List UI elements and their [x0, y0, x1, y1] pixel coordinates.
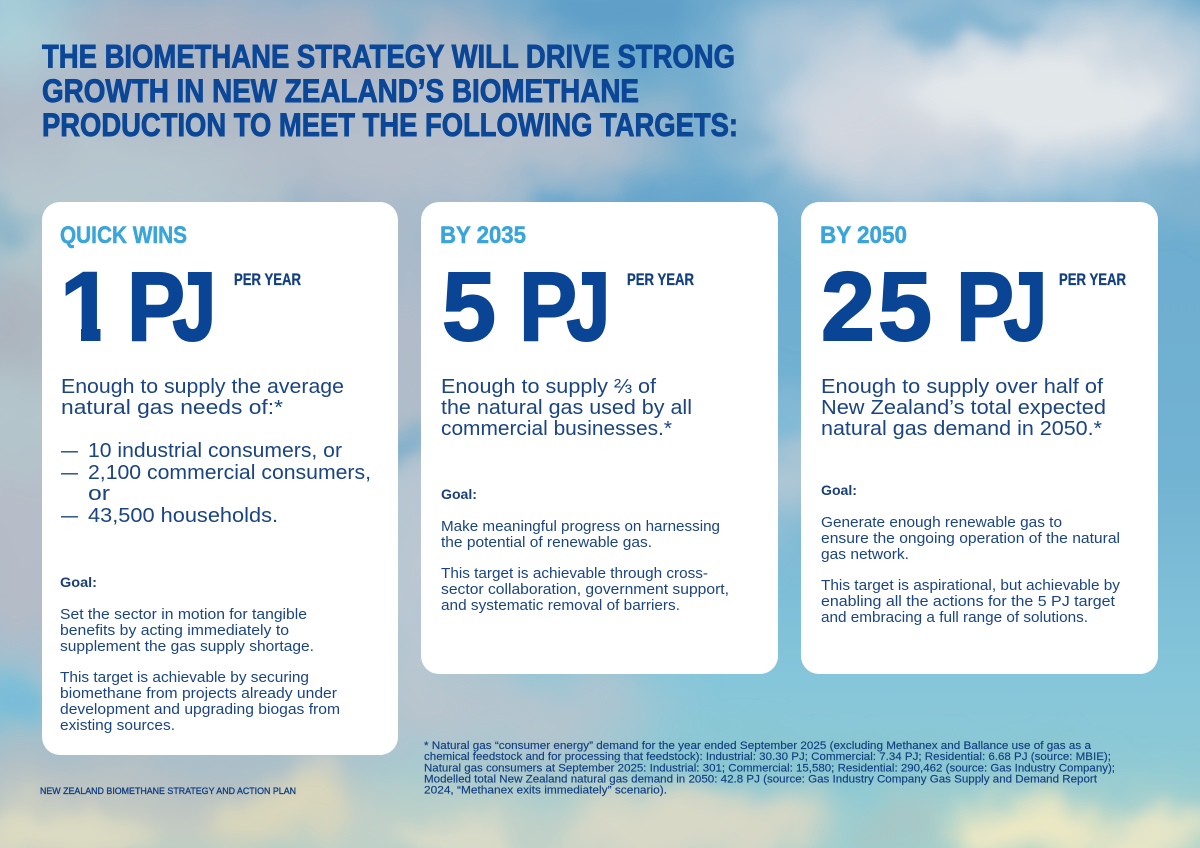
big number: 5 PJ: 5	[442, 252, 496, 361]
goal label: Goal:	[821, 482, 857, 498]
goal text: Make meaningful progress on harnessing	[441, 519, 720, 535]
goal text: This target is achievable by securing	[60, 670, 309, 686]
big number: 25 PJ: 2	[821, 252, 875, 361]
footnote: Modelled total New Zealand natural gas demand in 2050: 42.8 PJ (source: Gas Industry Company Gas Supply and Demand Report	[424, 774, 1097, 786]
big number: 1 PJ: 1	[60, 252, 114, 361]
big number: 25 PJ: 5	[878, 252, 932, 361]
consumer list: 43,500 households.	[88, 505, 278, 527]
big number: 1 PJ: J	[172, 252, 216, 361]
description: natural gas needs of:*	[61, 397, 283, 419]
goal text: and systematic removal of barriers.	[441, 598, 680, 614]
panel: by 2050	[801, 202, 1158, 674]
panel: quick wins	[42, 202, 398, 755]
goal label: Goal:	[60, 574, 97, 590]
title: PRODUCTION TO MEET THE FOLLOWING TARGETS:	[42, 107, 738, 143]
heading: by 2035: BY 2035	[440, 222, 526, 249]
consumer list	[61, 440, 371, 527]
goal text	[821, 515, 1121, 626]
description: the natural gas used by all	[441, 397, 692, 419]
goal text: and embracing a full range of solutions.	[821, 610, 1088, 626]
goal label: Goal:	[441, 486, 477, 502]
unit: per year: PER YEAR	[1059, 270, 1126, 289]
big number: 5 PJ	[442, 252, 610, 361]
big number: 25 PJ: J	[1003, 252, 1047, 361]
publication name: NEW ZEALAND BIOMETHANE STRATEGY AND ACTION PLAN	[40, 786, 296, 796]
big number: 1 PJ	[66, 272, 212, 342]
goal text: biomethane from projects already under	[60, 686, 337, 702]
goal text: benefits by acting immediately to	[60, 623, 289, 639]
heading: quick wins: QUICK WINS	[60, 222, 187, 249]
title	[42, 38, 738, 143]
goal text: ensure the ongoing operation of the natural	[821, 531, 1120, 547]
unit: per year: PER YEAR	[627, 270, 694, 289]
description: natural gas demand in 2050.*	[821, 418, 1102, 440]
goal text: This target is achievable through cross-	[441, 566, 708, 582]
heading: by 2050: BY 2050	[820, 222, 907, 249]
footnote: * Natural gas “consumer energy” demand for the year ended September 2025 (excluding Methanex and Ballance use of gas as a	[424, 740, 1092, 752]
goal text: enabling all the actions for the 5 PJ target	[821, 594, 1115, 610]
goal text: sector collaboration, government support,	[441, 582, 729, 598]
consumer list: or	[88, 483, 110, 505]
description: commercial businesses.*	[441, 418, 672, 440]
title: GROWTH IN NEW ZEALAND’S BIOMETHANE	[42, 73, 639, 109]
goal text: Set the sector in motion for tangible	[60, 607, 307, 623]
description: Enough to supply over half of	[821, 376, 1103, 398]
goal text: This target is aspirational, but achievable by	[821, 578, 1121, 594]
footnote	[424, 740, 1115, 796]
goal text: the potential of renewable gas.	[441, 535, 652, 551]
goal text	[441, 519, 729, 614]
description	[61, 376, 344, 419]
consumer list: —	[61, 505, 78, 527]
goal text: development and upgrading biogas from	[60, 702, 340, 718]
big number: 5 PJ: J	[566, 252, 610, 361]
footnote: chemical feedstock and for processing that feedstock): Industrial: 30.30 PJ; Commercial: 7.34 PJ; Residential: 6.68 PJ (source: MBIE);	[424, 751, 1111, 763]
description: Enough to supply the average	[61, 376, 344, 398]
goal text: gas network.	[821, 547, 909, 563]
title: THE BIOMETHANE STRATEGY WILL DRIVE STRONG	[42, 38, 735, 74]
goal text: Generate enough renewable gas to	[821, 515, 1062, 531]
goal text: existing sources.	[60, 718, 175, 734]
consumer list: —	[61, 462, 78, 484]
description: New Zealand’s total expected	[821, 397, 1106, 419]
big number: 1 PJ: P	[127, 252, 185, 361]
big number: 25 PJ	[821, 252, 1047, 361]
consumer list: 10 industrial consumers, or	[88, 440, 342, 462]
unit: per year: PER YEAR	[234, 270, 301, 289]
goal text: supplement the gas supply shortage.	[60, 639, 314, 655]
goal text	[60, 607, 340, 734]
footnote: 2024, “Methanex exits immediately” scenario).	[424, 784, 667, 796]
description	[821, 376, 1106, 440]
panel: by 2035	[421, 202, 778, 674]
big number: 25 PJ: P	[956, 252, 1014, 361]
consumer list: —	[61, 440, 78, 462]
big number: 5 PJ: P	[519, 252, 577, 361]
consumer list: 2,100 commercial consumers,	[88, 462, 371, 484]
description: Enough to supply ⅔ of	[441, 376, 656, 398]
description	[441, 376, 692, 440]
footnote: Natural gas consumers at September 2025: Industrial: 301; Commercial: 15,580; Residential: 290,462 (source: Gas Industry Company);	[424, 762, 1115, 774]
